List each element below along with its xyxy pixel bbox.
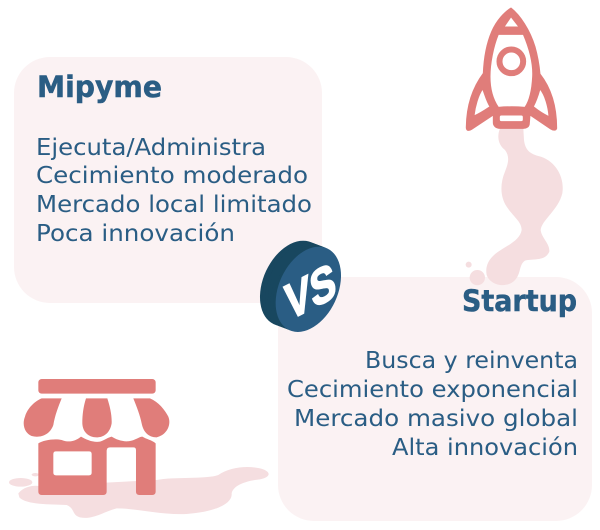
text block: Startup traits [287, 346, 578, 461]
panel: Mipyme background [14, 57, 322, 303]
text block: Mipyme traits [36, 133, 312, 247]
icon: rocket exhaust trail [466, 128, 563, 285]
text block: Mipyme traits: Cecimiento moderado [36, 161, 308, 189]
text block: Startup traits: Alta innovación [392, 433, 578, 461]
badge label: VS [282, 253, 339, 332]
icon: store [24, 379, 169, 495]
text block: Mipyme traits: Poca innovación [36, 219, 235, 247]
icon: puddle under store [9, 467, 269, 518]
store awning [24, 398, 169, 437]
badge face [263, 236, 354, 343]
text block: Mipyme traits: Mercado local limitado [36, 190, 312, 218]
badge side [247, 230, 352, 342]
icon: rocket [466, 8, 557, 130]
store building [38, 437, 156, 495]
heading: Mipyme: Mipyme [37, 70, 162, 104]
text block: Startup traits: Cecimiento exponencial [287, 375, 578, 403]
text block: Startup traits: Busca y reinventa [365, 346, 578, 374]
text block: Startup traits: Mercado masivo global [294, 404, 578, 432]
text block: Mipyme traits: Ejecuta/Administra [36, 133, 266, 161]
heading: Startup: Startup [462, 284, 577, 318]
store roof bar [38, 379, 156, 394]
icon: VS badge [247, 230, 354, 343]
panel: Startup background [278, 277, 592, 521]
